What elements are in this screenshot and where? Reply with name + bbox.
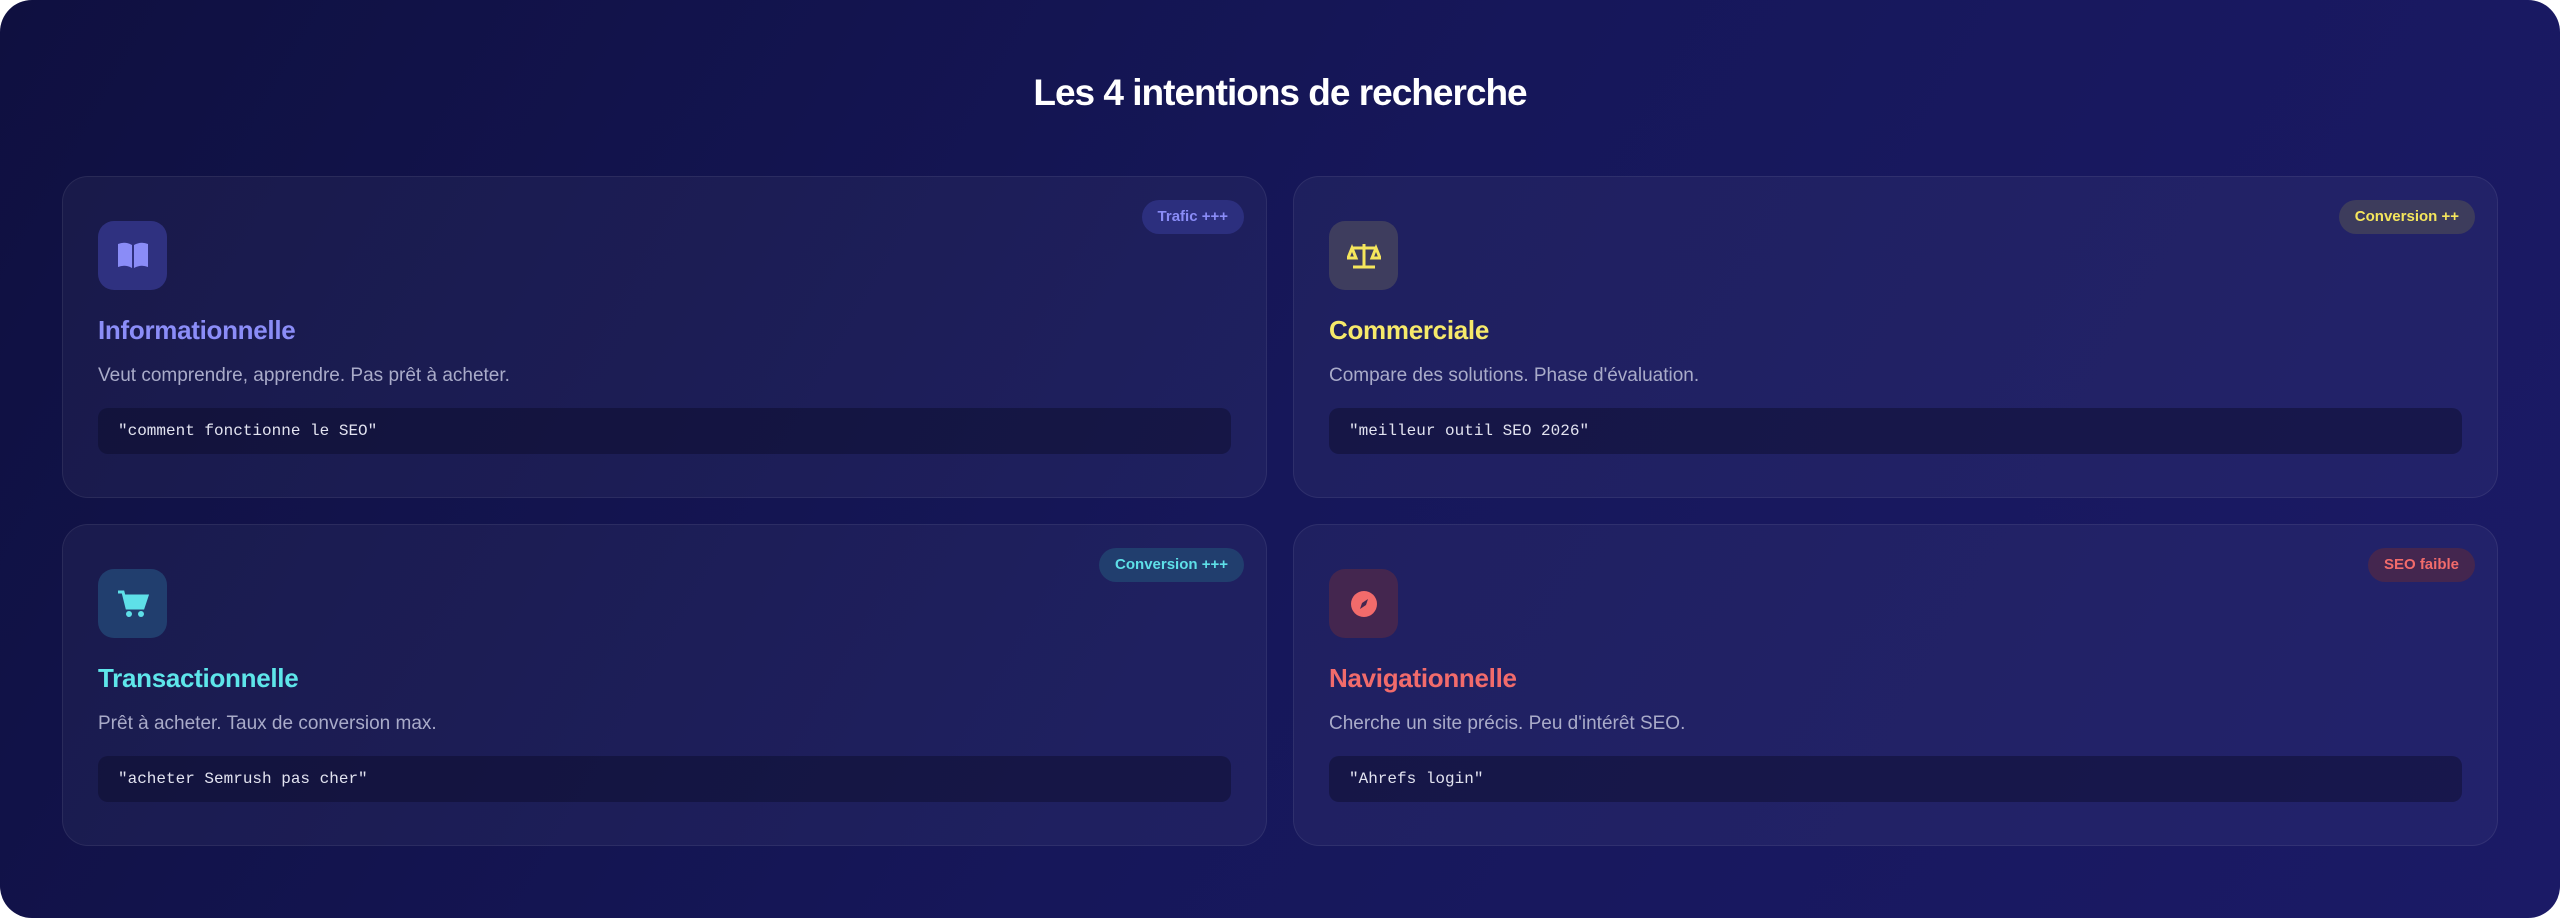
badge: Trafic +++ [1158, 208, 1228, 225]
panel: informationnelle [62, 176, 1267, 498]
code example [1329, 408, 2462, 454]
description: Veut comprendre, apprendre. Pas prêt à acheter. [98, 365, 510, 386]
description: Compare des solutions. Phase d'évaluation. [1329, 365, 1699, 386]
icon: scales [1329, 221, 1398, 290]
badge [2339, 200, 2475, 234]
badge [1142, 200, 1244, 234]
badge: SEO faible [2384, 556, 2459, 573]
code example: "meilleur outil SEO 2026" [1349, 422, 1589, 440]
badge: Conversion ++ [2355, 208, 2459, 225]
code example: "comment fonctionne le SEO" [118, 422, 377, 440]
panel: navigationnelle [1293, 524, 2498, 846]
heading: Informationnelle [98, 315, 295, 345]
heading: Transactionnelle [98, 663, 298, 693]
badge: Conversion +++ [1115, 556, 1228, 573]
icon: book [98, 221, 167, 290]
panel: commerciale [1293, 176, 2498, 498]
description: Prêt à acheter. Taux de conversion max. [98, 713, 437, 734]
code example: "Ahrefs login" [1349, 770, 1483, 788]
badge [2368, 548, 2475, 582]
description: Cherche un site précis. Peu d'intérêt SEO. [1329, 713, 1685, 734]
icon: cart [98, 569, 167, 638]
icon: compass [1329, 569, 1398, 638]
heading: Navigationnelle [1329, 663, 1517, 693]
code example [1329, 756, 2462, 802]
code example [98, 756, 1231, 802]
panel: transactionnelle [62, 524, 1267, 846]
code example: "acheter Semrush pas cher" [118, 770, 368, 788]
heading: Commerciale [1329, 315, 1489, 345]
title: Les 4 intentions de recherche [1033, 72, 1527, 113]
badge [1099, 548, 1244, 582]
code example [98, 408, 1231, 454]
